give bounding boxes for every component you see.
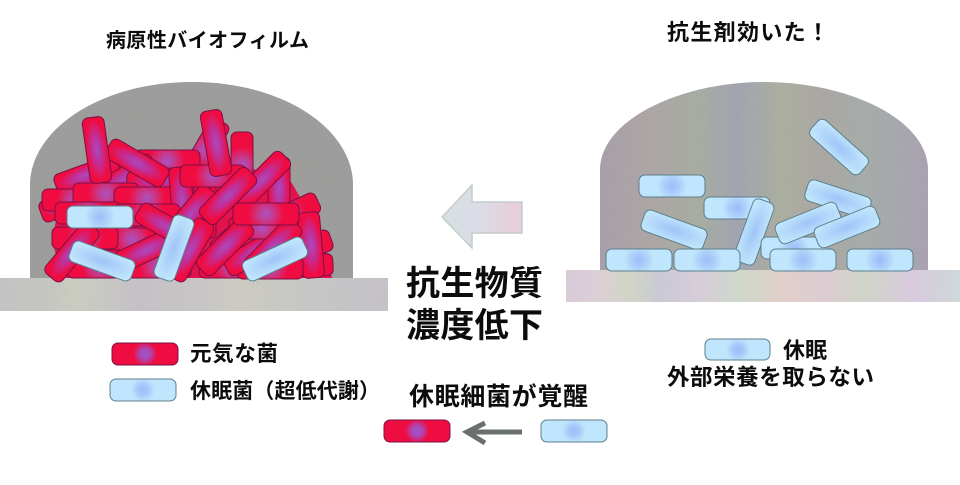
legend: dormant cells do not take nutrients xyxy=(667,338,874,390)
awakening diagram xyxy=(384,420,607,443)
title: antibiotic worked: 抗生剤効いた！ xyxy=(667,20,829,45)
legend: dormant cells do not take nutrients: 休眠 xyxy=(783,338,827,363)
heading: antibiotic concentration decreases: 抗生物質 xyxy=(406,265,543,303)
active bacterium xyxy=(384,420,450,442)
panel: right dome and surface xyxy=(566,82,960,302)
title: pathogenic biofilm: 病原性バイオフィルム xyxy=(106,29,309,52)
dormant bacteria after antibiotic xyxy=(606,117,913,271)
label: dormant bacteria awaken: 休眠細菌が覚醒 xyxy=(409,382,588,411)
dormant bacterium xyxy=(541,420,607,442)
legend: active bacteria: 元気な菌 xyxy=(190,342,278,366)
heading: antibiotic concentration decreases: 濃度低下 xyxy=(406,307,543,345)
legend: dormant bacteria xyxy=(110,379,380,403)
panel: left biofilm dome and surface xyxy=(0,82,388,311)
heading: antibiotic concentration decreases xyxy=(406,265,543,345)
legend: dormant cells do not take nutrients: 外部栄養を取らない xyxy=(667,365,874,390)
dormant bacteria in biofilm xyxy=(67,206,310,283)
legend: active bacteria xyxy=(112,342,278,366)
arrow: awakening xyxy=(467,423,522,443)
active bacteria cluster xyxy=(37,109,335,284)
arrow: pastel left arrow xyxy=(442,185,522,248)
legend: dormant bacteria: 休眠菌（超低代謝） xyxy=(190,380,380,403)
